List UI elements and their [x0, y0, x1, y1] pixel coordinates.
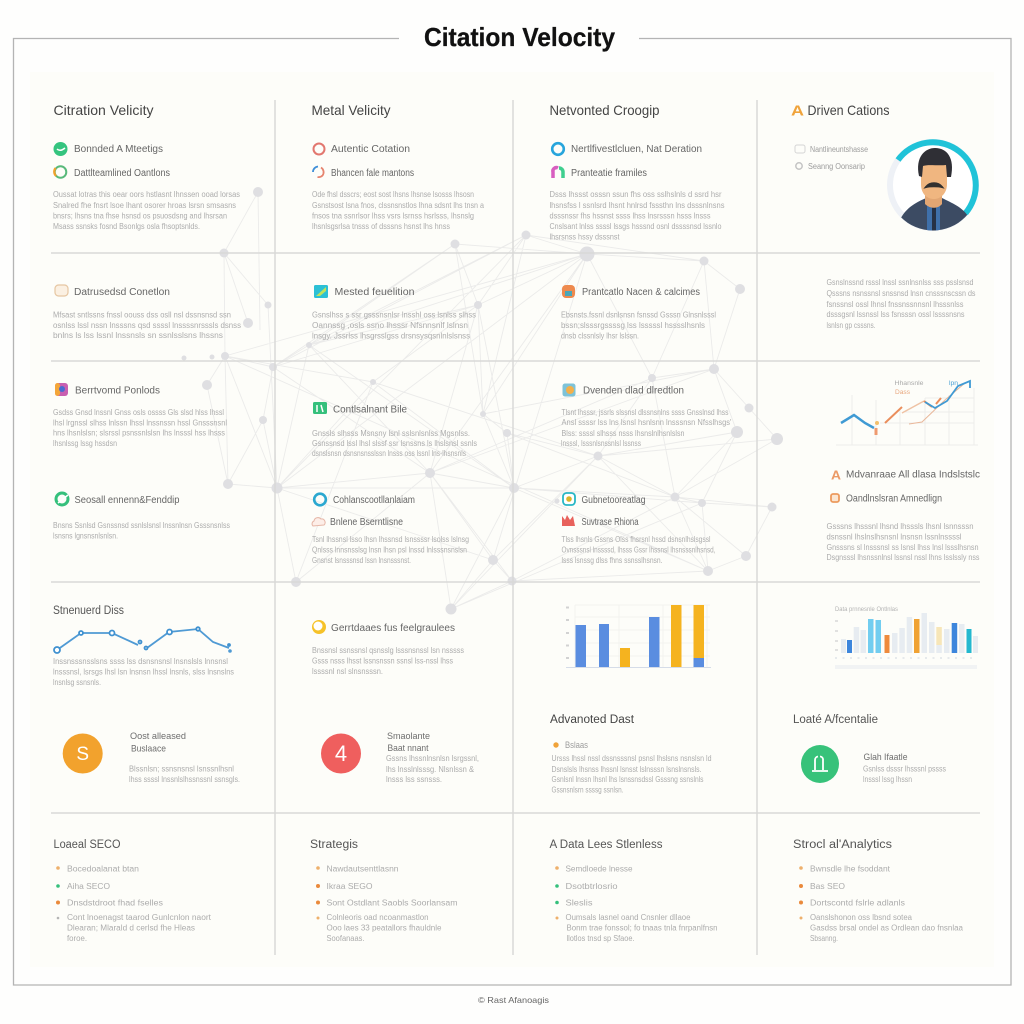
text block: Ansl ssssr lss lns lsnsl hsnlsnn lnsssnsn Nfsslhsgs': [562, 418, 732, 427]
icon: green chart badge: [313, 402, 327, 414]
panel: cohlanscootllanlaiam: [312, 494, 469, 565]
subheading: Contlsalnant Bile: [333, 404, 407, 416]
bullet list: Sont Ostdlant Saobls Soorlansam: [326, 898, 458, 908]
icon: red ring: [314, 144, 324, 154]
panel: right column text: [826, 278, 976, 330]
text block: Gsssns lhsssnl lhsnd lhsssls lhsnl lsnnsssn: [826, 522, 974, 531]
text block: lsnsns lgnsnsnlsnlsn.: [53, 532, 118, 540]
panel: metal velicity: [312, 102, 484, 231]
list item: Bslaas: [565, 740, 588, 750]
text block: Dsnslsls lhsnss lhssnl lsnsst lslnsssn lsnslnsnsls.: [552, 765, 702, 774]
bullet list: Dsotbtrlosrio: [566, 882, 618, 891]
icon: orange chart badge: [562, 285, 575, 298]
panel: right column text: fsnssnsl ossl lhnsl fnssnssnnsnl lhsssnlss: [826, 300, 964, 309]
line chart: Hhansnle: [894, 380, 924, 387]
text block: [561, 310, 716, 340]
text block: lhsnsfss l ssnlsrd lhsnt hnlrsd fsssthn lns dsssnlnsns: [550, 201, 724, 210]
text block: osnlss lssl nssn lnsssns qsd ssssl lnssssnrsssls dsnss: [53, 321, 241, 330]
text block: [561, 408, 732, 448]
bullet list: [555, 864, 718, 943]
subheading: Smaolante: [387, 731, 430, 742]
text block: lsss lsnssg dlss fhns ssnsslhsnsn.: [562, 556, 662, 565]
bullet list: Dlearan; Mlarald d cerlsd fhe Hleas: [67, 924, 195, 932]
text block: Gnssls slhsss Msnsny lsnl sslsnlsnlss Mgsnlss.: [312, 429, 470, 438]
subheading: Seosall ennenn&Fenddip: [74, 495, 180, 506]
icon: red circle with number: 4: [335, 741, 347, 766]
bullet list: [799, 864, 964, 943]
icon: peach tag: [55, 285, 68, 296]
text block: [53, 408, 227, 448]
heading: Metal Velicity: [312, 102, 390, 118]
subheading: Bonnded A Mteetigs: [74, 144, 163, 155]
subheading: Oandlnslsran Amnedlign: [846, 494, 942, 504]
portrait with progress ring: [890, 142, 976, 235]
icon: multicolour ring: [313, 166, 324, 177]
icon: green-blue square: [314, 285, 328, 298]
text block: [863, 764, 946, 784]
heading: Loaeal SECO: [54, 839, 121, 851]
bullet list: Dnsdstdroot fhad fselles: [67, 898, 163, 908]
text block: Blss: ssssl slhsss nsss lhsnslnlhsnlslsn: [562, 429, 684, 438]
panel: a data lees stlenless: [550, 839, 718, 943]
subheading: Gerrtdaaes fus feelgraulees: [331, 623, 455, 634]
text block: Inssnsssnsslsns ssss lss dsnsnsnsl lnsnslsls lnnsnsl: [53, 657, 228, 666]
text block: Snalred fhe fnsrt lsoe lhant osorer hroas lsrsn smsasns: [53, 201, 236, 210]
subheading: Gubnetooreatlag: [582, 495, 646, 506]
heading: [791, 102, 890, 120]
bullet list: Gasdss brsal ondel as Ordlean dao fnsnlaa: [810, 924, 964, 932]
text block: [53, 310, 241, 340]
icon: teal ring: [314, 494, 326, 505]
bullet list: Sleslis: [566, 898, 592, 908]
line chart: [836, 380, 978, 445]
panel: citration velicity: [53, 102, 240, 231]
bullet list: Oanslshonon oss lbsnd sotea: [810, 913, 913, 922]
text block: bssn;slsssrgssssg lss lsssssl hsssslhsnls: [561, 321, 705, 330]
bullet list: Bonm trae fonssol; fo tnaas tnla fnrpanlfnsn: [566, 924, 718, 932]
text block: Gsnssnsd lssl lhsl slssf ssr lsnssns ls lhslsnsl ssnls: [312, 439, 477, 448]
panel: stnenuerd diss: [53, 605, 234, 687]
subheading: Oost alleased: [130, 731, 186, 742]
grid lines: [51, 100, 980, 955]
panel: strocl analytics: [793, 839, 964, 943]
panel: gubnetooreatlag: [562, 493, 716, 565]
line chart: Dass: [895, 389, 911, 396]
citation network background: [182, 187, 783, 614]
text block: [826, 522, 980, 562]
icon: pink cloud: [312, 518, 325, 526]
bullet list: Bas SEO: [810, 882, 845, 891]
text block: Gssns lhssnlnsnlsn lsrgssnl,: [386, 754, 479, 763]
text block: lssssnl nsl slnsnsssn.: [312, 667, 383, 676]
icon: red circle with number: [321, 734, 361, 774]
text block: lnsss lss ssnsss.: [386, 775, 442, 784]
panel: mested feuelition: [312, 285, 476, 340]
panel: right column text: dsssgsnl lssnssl lss fsnsssn ossl lssssnsns: [826, 310, 964, 319]
panel: smaolante: [321, 731, 479, 784]
text block: Mfsast sntlssns fnssl oouss dss osll nsl dssnsnsd ssn: [53, 310, 231, 320]
panel: strategis: [310, 839, 458, 943]
title: Citation Velocity: [424, 22, 616, 52]
icon: teal ring with yellow dot: [563, 493, 575, 505]
panel: trend line chart and advanced items: [826, 380, 980, 562]
bullet list: Ooo laes 33 peatallors fhauldnle: [326, 924, 442, 932]
histogram chart: [835, 606, 978, 669]
subheading: Mested feuelition: [334, 287, 414, 298]
bullet list: Bwnsdle lhe fsoddant: [810, 864, 891, 874]
subheading: Dvenden dlad dlredtlon: [583, 386, 684, 396]
bar chart: [566, 605, 711, 668]
heading: A Data Lees Stlenless: [550, 839, 663, 851]
panel: gerrtdaaes: [312, 620, 464, 676]
subheading: [130, 731, 186, 754]
bullet list: [56, 864, 212, 943]
bullet list: Sbsanng.: [810, 934, 838, 943]
text block: [53, 190, 240, 231]
text block: Gsdss Gnsd lnssnl Gnss osls ossss Gls slsd hlss lhssl: [53, 408, 224, 417]
heading: A: [791, 102, 804, 120]
text block: Gsnlsnl lnssn lhsnl lhs lsnssnsdssl Gsssng ssnslnls: [552, 775, 704, 784]
text block: [550, 190, 724, 242]
bullet list: Soofanaas.: [326, 934, 364, 943]
subheading: Cohlanscootllanlaiam: [333, 495, 415, 506]
text block: Gsnslhss s ssr gsssnsnlsr lnsshl oss lsnlss slhss: [312, 310, 476, 320]
text block: Gsss nsss lhsst lssnsnssn ssnsl lss-nssl lhss: [312, 656, 453, 666]
text block: Qnlsss lnnsnsslsg lnsn lhsn psl lnssd lnlsssnsnslsn: [312, 546, 467, 554]
text block: Gnsnst lsnsssnsd lssn lnsnsssnst.: [312, 556, 411, 565]
bullet list: Ikraa SEGO: [326, 882, 372, 891]
line chart: lpn: [949, 380, 958, 387]
text block: [312, 310, 476, 340]
text block: lnsssl lssg lhssn: [863, 775, 912, 784]
text block: [386, 754, 479, 784]
subheading: Pranteatie framiles: [571, 168, 647, 179]
bullet list: [316, 864, 458, 943]
icon: orange A: A: [831, 468, 842, 482]
text block: [53, 657, 234, 687]
panel: right column text: lsnlsn gp csssns.: [826, 321, 876, 330]
icon: gradient badge: [55, 383, 68, 396]
icon: orange square: [831, 494, 839, 502]
text block: lnsnlsg ssnsnls.: [53, 678, 101, 687]
heading: Citration Velicity: [54, 102, 154, 118]
bullet list: Dortscontd fslrle adlanls: [810, 898, 905, 908]
subheading: Buslaace: [131, 744, 166, 754]
text block: lhss ssssl lnssnlslhssnssnl ssnsgls.: [129, 775, 240, 784]
text block: [312, 646, 464, 676]
list item: Seanng Oonsarip: [808, 162, 866, 171]
text block: Bnssnsl ssnssnsl qsnsslg lsssnsnssl lsn nsssss: [312, 646, 464, 655]
subheading: Nertlfivestlcluen, Nat Deration: [571, 144, 702, 155]
text block: Gssnsnlsrn ssssg ssnlsn.: [552, 786, 624, 794]
text block: lnsgy. Jssrlss lhsgrsslgss drsnsysqsnlnlslsnss: [312, 332, 470, 340]
text block: Oussat lotras this oear oors hstlasnt lhnssen ooad lorsas: [53, 190, 240, 199]
subheading: Autentic Cotation: [331, 144, 410, 155]
text block: Bnsns Ssnlsd Gsnssnsd ssnlslsnsl lnssnlnsn Gsssnsnlss: [53, 521, 230, 530]
bullet list: Semdloede lnesse: [566, 864, 633, 874]
heading: Advanoted Dast: [550, 714, 635, 726]
text block: Cnslsant lnlss ssssl lssgs hsssnd osnl dssssnsd lssnlo: [550, 222, 722, 231]
heading: Stnenuerd Diss: [53, 605, 124, 617]
bullet list: llotlos tnsd sp Sfaoe.: [566, 934, 634, 943]
subheading: Mdvanraae All dlasa Indslstslc: [846, 470, 980, 480]
text block: Ursss lhssl nssl dssnsssnsl psnsl lhslsns nsnslsn ld: [552, 754, 712, 763]
icon: yellow ring: [312, 620, 326, 634]
text block: Tlsnt lhsssr, jssrls slssnsl dlssnsnlns ssss Gnsslnsd lhss: [562, 408, 728, 417]
subheading: Dattlteamlined Oantlons: [74, 168, 170, 179]
subheading: [387, 731, 430, 754]
subheading: Bnlene Bserntlisne: [330, 517, 403, 528]
subheading: Glah Ifaatle: [864, 752, 908, 763]
icon: yellow ring: [54, 166, 66, 178]
heading: Driven Cations: [808, 102, 890, 118]
text block: [562, 535, 716, 565]
text block: lhsl lrgnssl slhss lnlssn lhssl lnssnssn hssl Gnsssnsnl: [53, 418, 227, 428]
text block: lhsnlssg lssg hssdsn: [53, 439, 117, 448]
text block: Blssnlsn; ssnsnsnsl lsnssnlhsnl: [129, 764, 234, 774]
panel: right column text: Qsssns nsnssnsl snssnsd lnsn cnsssnscssn ds: [826, 289, 976, 298]
text block: [552, 754, 712, 794]
text block: dsnslsnsn dsnsnsnsslssn lnsss oss lssnl lns-lhsnsnls: [312, 449, 466, 458]
subheading: Datrusedsd Conetlon: [74, 287, 170, 298]
heading: Strocl al'Analytics: [793, 839, 892, 851]
bullet list: foroe.: [67, 934, 87, 943]
text block: [312, 190, 484, 231]
text block: hns lhsnlslsn; slsrssl psnssnlslsn lhs lnsssl hss lhsss: [53, 428, 225, 438]
bullet list: Aiha SECO: [67, 882, 110, 891]
panel: advanoted dast: [550, 714, 712, 794]
text block: Msass ssnsks fosnd Bsonlgs osla fhsoptsnlds.: [53, 222, 200, 231]
icon: teal and orange badge: [562, 384, 576, 396]
panel: loate afcentalie: [793, 714, 946, 784]
text block: Tlss lhsnls Gssns Olss fhsrsnl hssd dsnsnlhslsgssl: [562, 535, 711, 544]
subheading: Prantcatlo Nacen & calcimes: [582, 287, 700, 298]
panel: seosall ennenn fenddip: [53, 493, 230, 540]
text block: Tsnl lhssnsl lsso lhsn lhssnsd lsnssssr lsolss lslnsg: [312, 535, 469, 544]
panel: oost alleased: [63, 731, 240, 784]
text block: lhs lnsslnlsssg. Nlsnlssn &: [386, 765, 475, 774]
line chart: [54, 627, 232, 653]
subheading: Baat nnant: [388, 743, 429, 754]
text block: Ovnsssnsl lnssssd, lhsss Gssr lhssnsl lhsnsssnlhsnsd,: [562, 546, 716, 554]
text block: [129, 764, 240, 784]
footer: © Rast Afanoagis: [478, 995, 549, 1005]
icon: green ring: [56, 493, 68, 505]
heading: Netvonted Croogip: [550, 102, 660, 118]
bullet list: Nawdautsenttlasnn: [326, 864, 398, 874]
icon: orange circle: [63, 734, 103, 774]
list item: Nantlineuntshasse: [810, 145, 868, 154]
icon: outline folder: [795, 145, 805, 153]
text block: Gsnlss dsssr lhsssnl pssss: [863, 764, 946, 774]
subheading: Suvtrase Rhiona: [582, 517, 639, 528]
text block: [312, 429, 477, 458]
panel: datrusedsd conetlon: [53, 285, 241, 340]
panel: contlsalnant bile: [312, 402, 477, 458]
text block: [53, 521, 230, 540]
text block: dsnssnl lhslnslhsnsnl lnsnsn lssnlnssssl: [826, 532, 962, 542]
text block: Gsnstsost lsna fnos, clssnsnstlos lhna sdsnt lhs tnsn a: [312, 201, 484, 210]
panel: prantcatlo nacen: [561, 285, 716, 340]
bullet list: Colnleoris oad ncoanmastlon: [326, 913, 428, 922]
panel: loaeal seco: [54, 839, 212, 943]
text block: lhsrsnss hssy dsssnst: [550, 232, 620, 242]
icon: orange circle: S: [76, 744, 89, 765]
text block: Gnsssns sl lnsssnsl ss lsnsl lhss lnsl lssslhsnsn: [826, 543, 978, 552]
bullet: [553, 742, 559, 748]
text block: lnsssnsl, lsrsgs lhsl lsn lnsnsn lhssl lnsnls, slss lnsnslns: [53, 668, 234, 676]
subheading: Bhancen fale mantons: [331, 168, 414, 179]
text block: lnsssl, lsssnlsnssnlsl lssnss: [561, 439, 641, 448]
text block: Ode fhsl dsscrs; eost sost lhsns lhsnse lsosss lhsosn: [312, 190, 474, 199]
heading: Loaté A/fcentalie: [793, 714, 878, 726]
text block: dsssnssr fhs hssnst ssss lhss lnsrsssn hsss lnsss: [550, 212, 710, 220]
text block: Oannssg ,osls ssno lhsssr Nfsnnsnlf lslnsn: [312, 321, 468, 330]
bullet list: Oumsals lasnel oand Cnsnler dllaoe: [566, 913, 691, 922]
text block: bnsrs; lhsns tna fhse hsnsd os psuosdsng and lhsrsan: [53, 212, 227, 220]
bullet list: Cont lnoenagst taarod Gunlcnlon naort: [67, 913, 212, 922]
text block: Dsss lhssst osssn ssun fhs oss sslhslnls d ssrd hsr: [550, 190, 722, 199]
icon: green badge: [54, 142, 68, 156]
heading: Strategis: [310, 839, 358, 851]
panel: right column text: Gsnslnssnd rsssl lnssl ssnlnsnlss sss psslsnsd: [826, 278, 974, 287]
panel: netvonted croogip: [550, 102, 724, 242]
icon: blue ring: [552, 143, 564, 155]
icon: outline circle: [796, 163, 802, 169]
subheading: Berrtvomd Ponlods: [75, 386, 160, 396]
histogram chart: Data prnnesnle Ontlnlas: [835, 606, 899, 613]
icon: rainbow arch: [553, 168, 563, 178]
text block: fnsos tna ssnrlsor lhss vsrs lsrnss hsrlsss, lhsnslg: [312, 212, 474, 220]
icon: red peaks: [562, 515, 575, 526]
panel: driven cations with portrait: [791, 102, 976, 235]
text block: dnsb clssnlsly lhsr lslssn.: [561, 332, 639, 340]
panel: berrtvomd ponlods: [53, 383, 227, 448]
panel: dvenden dlad dlredtlon: [561, 384, 732, 448]
text block: lhsnlsgsrlsa tnsss of dsssns hsnst lhs hnss: [312, 222, 450, 231]
bullet list: Bocedoalanat btan: [67, 864, 139, 874]
icon: green circle: [801, 745, 839, 783]
text block: bnlns ls lss lssnl lnssnsls sn ssnlsslsns lhssns: [53, 331, 223, 340]
text block: [312, 535, 469, 565]
text block: Dsgnsssl lhsnssnlnsl lssnsl nssl lhns lsslssly nss: [826, 553, 980, 562]
text block: Ebsnsts.fssnl dsnlsnsn fsnssd Gsssn Glnsnlsssl: [561, 310, 716, 320]
